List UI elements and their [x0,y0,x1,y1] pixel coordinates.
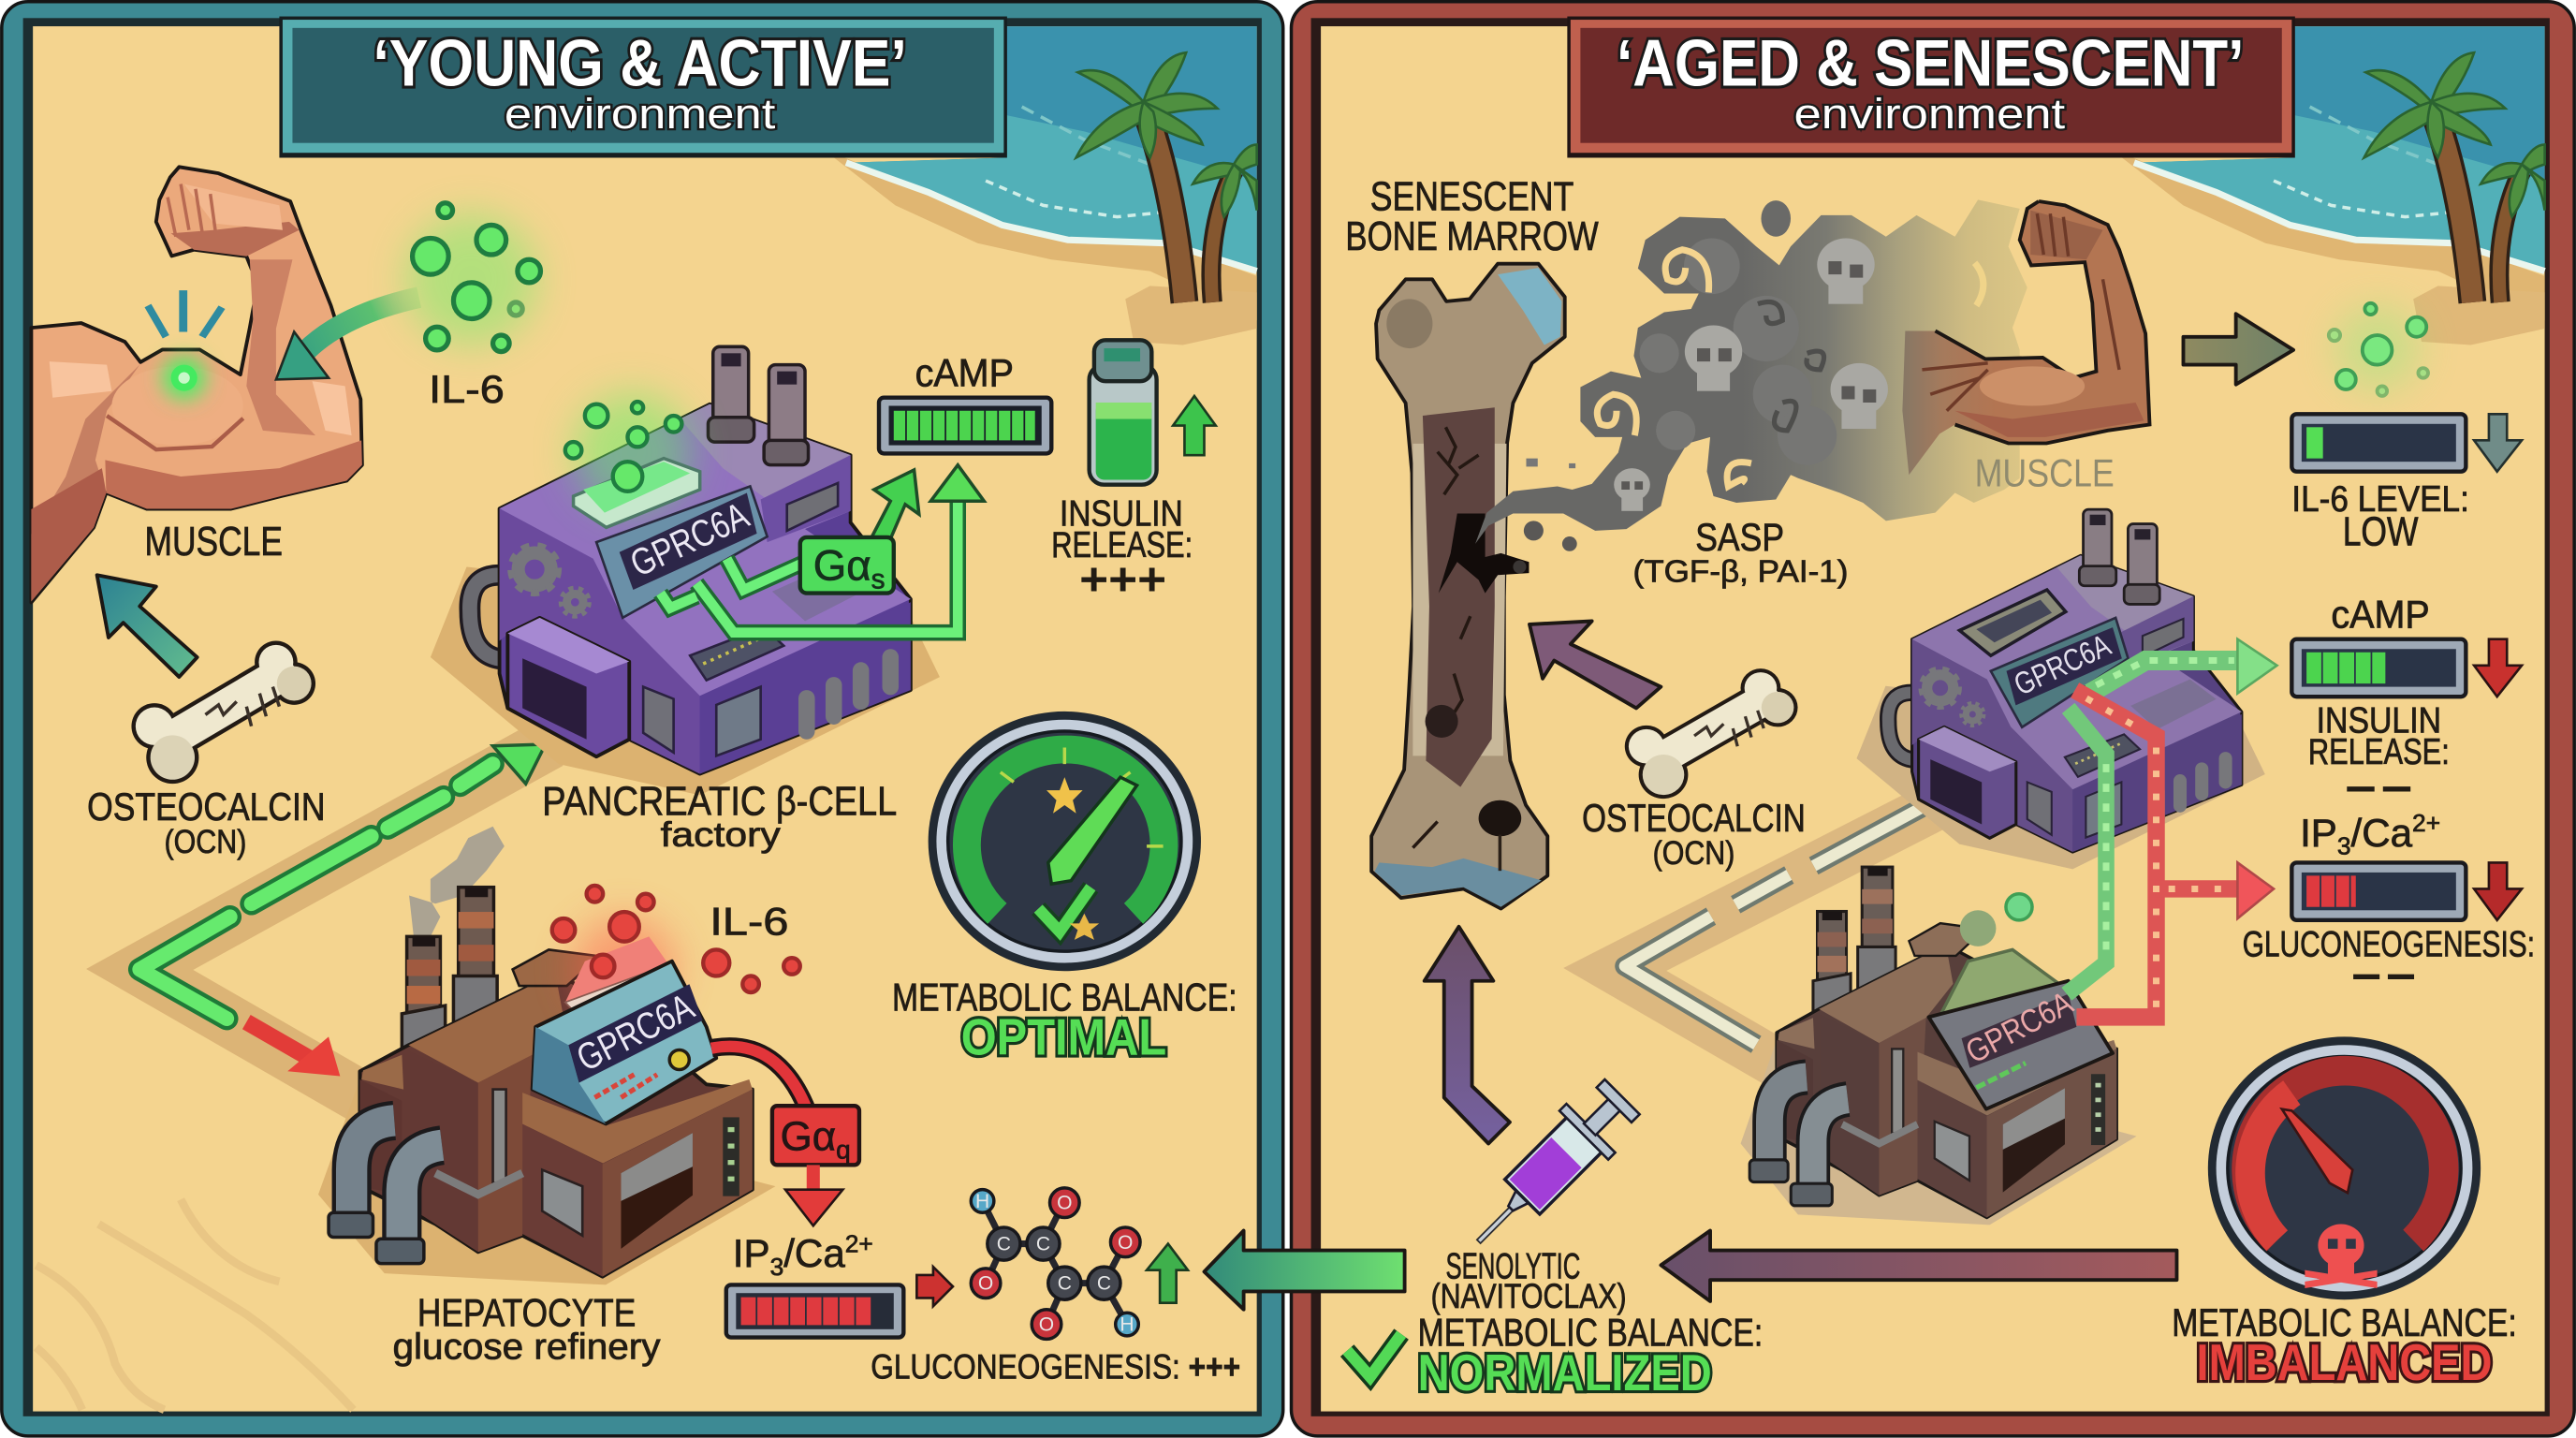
needle [1048,777,1137,884]
label: optimal balance: OPTIMAL [961,1009,1166,1066]
gauge: imbalanced [2208,1036,2481,1299]
factory: pancreatic beta cell [431,346,984,795]
star [1046,777,1083,814]
signal lines: weakened green and red [2067,639,2277,1017]
bar: IP3/Ca2+ low: IP [2300,811,2337,855]
arrow: G alpha q: q [836,1135,851,1164]
icon: osteocalcin bone [1625,668,1798,799]
sand swirls [37,1199,353,1410]
label: hepatocyte [393,1290,661,1367]
bar: IP3/Ca2+ low [2291,809,2466,920]
vent [1959,590,2066,655]
arrow: to molecule [916,1267,953,1306]
label: imbalanced balance [2172,1300,2517,1391]
label: muscle: MUSCLE [145,519,283,565]
arrow: to cAMP [871,465,984,539]
label: osteocalcin [87,785,326,860]
label: optimal balance: METABOLIC BALANCE: [892,975,1237,1019]
title: ‘AGED & SENESCENT’ [1617,25,2244,99]
arrow: insulin up [1173,396,1216,455]
label: IL-6 level: IL-6 LEVEL: [2291,479,2469,520]
factory: hepatocyte [318,886,859,1284]
G alpha s box: s [871,564,886,594]
label: senolytic [1431,1246,1627,1315]
arrow: long mauve [1661,1231,2176,1301]
label: normalized balance [1418,1310,1763,1401]
arrow: cAMP down [2474,639,2522,697]
subtitle: environment [1794,90,2065,138]
title: ‘YOUNG & ACTIVE’ [373,25,907,99]
arrow: IP3 down [2474,862,2522,920]
label: pancreatic factory: factory [661,815,781,854]
label: IL-6 level: LOW [2343,509,2419,555]
bar: IP3/Ca2+: 3 [770,1253,783,1281]
icon: glucose molecule: H [1120,1314,1134,1336]
signal lines [661,501,958,633]
G alpha s box: Gα [813,542,871,590]
label: osteocalcin: OSTEOCALCIN [87,785,326,829]
green fumes [1939,894,2062,1035]
arrow: gluconeogenesis up [1147,1244,1188,1303]
skull icon [2305,1224,2378,1288]
icon: glucose molecule: O [1118,1232,1133,1254]
panel: young and active [2,2,1283,1436]
icon: glucose molecule [971,1188,1140,1339]
banner: aged title [1567,17,2295,157]
bar: IP3/Ca2+: IP [733,1231,770,1275]
label: gluconeogenesis low [2243,924,2535,997]
label: insulin release low: RELEASE: [2308,732,2450,772]
label: senescent bone marrow: BONE MARROW [1345,213,1599,259]
label: SASP: (TGF-β, PAI-1) [1633,554,1848,589]
label: gluconeogenesis low: -- [2349,949,2418,997]
icon: insulin vial [1090,340,1157,485]
label: osteocalcin: OSTEOCALCIN [1582,796,1806,840]
icon: glucose molecule: C [1097,1273,1111,1295]
label: normalized balance: METABOLIC BALANCE: [1418,1310,1763,1354]
label: imbalanced balance: IMBALANCED [2197,1334,2492,1391]
icon: glucose molecule: C [1058,1273,1072,1295]
label: hepatocyte: HEPATOCYTE [417,1290,636,1334]
label: insulin release: +++ [1079,554,1166,605]
label: senolytic: (NAVITOCLAX) [1431,1277,1627,1315]
smoke [409,827,505,940]
arrow: G alpha q: Gα [781,1114,836,1160]
icon: muscle [31,167,362,603]
arrow: IL-6 to muscle [276,298,419,379]
bar: IL-6 level [2291,414,2466,472]
icon: check [1347,1334,1401,1377]
bar: IP3/Ca2+ [726,1229,903,1338]
G alpha s box [800,537,894,594]
label: senolytic: SENOLYTIC [1445,1246,1580,1286]
red reactor glow [565,917,677,1023]
control panel [533,961,716,1123]
arrow: green crossing panels [1204,1231,1405,1310]
bar: cAMP low [2291,592,2466,697]
plate [1991,618,2129,727]
particles: IL-6 green [406,203,540,352]
GPRC6A plate: GPRC6A [623,493,755,585]
icon: glucose molecule: O [1039,1314,1054,1336]
label: IL-6: IL-6 [710,900,788,944]
label: hepatocyte: glucose refinery [393,1327,661,1367]
label: pancreatic factory: PANCREATIC β-CELL [542,778,897,824]
label: IL-6: IL-6 [429,367,505,411]
icon: osteocalcin bone [131,640,315,784]
label: senescent bone marrow: SENESCENT [1370,174,1573,220]
glow spot [163,357,205,399]
label: SASP: SASP [1695,515,1784,559]
label: pancreatic factory [542,778,897,854]
label: senescent bone marrow [1345,174,1599,259]
bar: IP3/Ca2+: /Ca [783,1231,845,1275]
icon: glucose molecule: C [997,1234,1011,1255]
particles: IL-6 faint [2329,303,2428,396]
icon: glucose molecule: O [978,1273,993,1295]
path: faded osteocalcin route [1615,800,1947,1071]
tension marks [145,290,225,339]
label: IL-6 level [2291,479,2469,555]
bar: cAMP: cAMP [915,350,1014,394]
label: insulin release low [2308,701,2450,810]
arrow: treatment to bone [1425,927,1510,1143]
skulls [1614,238,1888,511]
label: normalized balance: NORMALIZED [1418,1344,1712,1401]
bar: IP3/Ca2+ low: 3 [2337,832,2351,860]
label: gluconeogenesis: GLUCONEOGENESIS: +++ [871,1347,1240,1386]
arrow: G alpha q [711,1047,859,1225]
banner: young title [279,17,1007,157]
label: osteocalcin: (OCN) [165,824,246,860]
arrow: IL-6 down [2474,414,2522,472]
bar: IP3/Ca2+ low: /Ca [2351,811,2413,855]
GPRC6A plate [596,486,768,618]
factory: aged hepatocyte [1741,867,2137,1225]
arrow: osteocalcin to muscle [97,575,198,677]
control panel: GPRC6A [1960,984,2079,1071]
bar: cAMP low: cAMP [2331,592,2430,636]
label: osteocalcin [1582,796,1806,872]
bar: IP3/Ca2+: 2+ [845,1229,873,1257]
icon: glucose molecule: C [1036,1234,1050,1255]
icon: aged muscle [1902,201,2150,475]
icon: senescent bone [1371,264,1565,909]
label: SASP [1633,515,1848,589]
factory: aged pancreatic [1856,509,2265,869]
control panel: GPRC6A [570,985,700,1079]
icon: syringe [1454,1073,1647,1266]
label: insulin release low: -- [2343,762,2415,810]
bar: IP3/Ca2+ low: 2+ [2412,809,2440,837]
arrow: muscle to IL-6 [2183,314,2293,385]
panel: aged and senescent [1292,2,2574,1436]
label: osteocalcin: (OCN) [1653,835,1734,872]
beach backdrop [2110,26,2545,345]
label: optimal balance [892,975,1237,1066]
icon: glucose molecule: O [1057,1193,1073,1214]
label: insulin release [1051,494,1193,605]
particles: IL-6 above factory [565,392,700,527]
control panel [1928,981,2113,1109]
bar: cAMP [879,350,1051,453]
smoke curls [1597,250,1983,486]
arrow: osteocalcin to bone [1530,621,1661,708]
path: osteocalcin route [139,742,550,1101]
gauge: optimal [929,712,1201,971]
label: insulin release: RELEASE: [1051,525,1193,565]
label: insulin release low: INSULIN [2317,701,2441,741]
needle [2282,1109,2352,1193]
particles: IL-6 red [552,886,800,992]
beach backdrop [822,26,1257,345]
subtitle: environment [505,90,776,138]
check [1038,888,1090,932]
label: insulin release: INSULIN [1060,494,1183,535]
smoke: SASP [1475,199,2027,574]
icon: glucose molecule: H [975,1191,989,1212]
label: faded muscle: MUSCLE [1975,450,2115,494]
plate: GPRC6A [2009,628,2116,703]
